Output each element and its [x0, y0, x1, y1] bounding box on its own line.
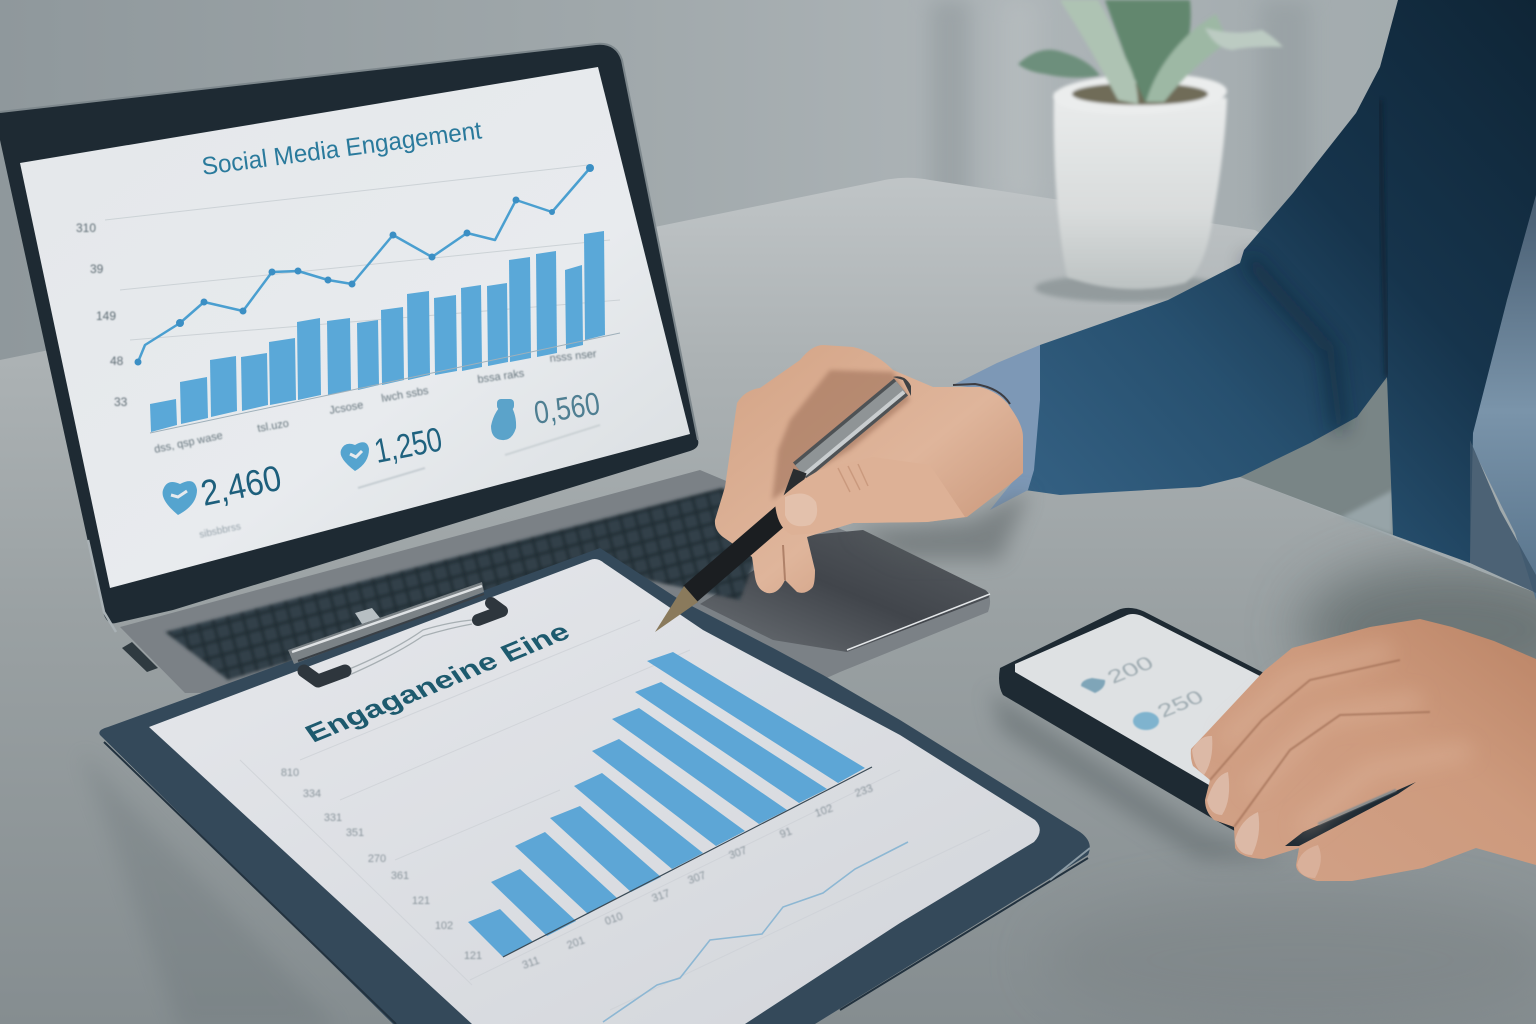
jacket sleeve and torso: [1025, 0, 1536, 563]
screen axis labels: 310: [76, 221, 96, 235]
clip caps: [304, 671, 345, 681]
clipboard axis labels: 91: [778, 825, 794, 841]
clipboard axis labels: 233: [853, 782, 875, 800]
clipboard axis labels: 270: [368, 853, 386, 865]
phone body: [999, 608, 1416, 845]
screen bar labels: dss, qsp wase: [153, 430, 224, 456]
clipboard axis labels: 307: [727, 844, 749, 862]
left hand with pen: [655, 345, 1030, 632]
background wall: [0, 0, 1536, 620]
finger creases: [1210, 660, 1430, 827]
clipboard axis labels: 331: [324, 812, 342, 824]
stat: 2,460: 2,460: [197, 457, 285, 514]
keyboard: [165, 488, 772, 680]
laptop screen: [20, 67, 690, 588]
fingernails: [1192, 736, 1212, 775]
right hand on phone: [1191, 619, 1536, 881]
stat: 2,460: [163, 457, 285, 541]
hand back: [715, 345, 1023, 593]
screen bar labels: [153, 348, 597, 456]
phone stat: 200: [1081, 652, 1158, 693]
stat: 0,560: [491, 385, 602, 455]
clip wires: [347, 620, 472, 676]
screen title: Social Media Engagement: [200, 116, 483, 181]
screen line chart: [134, 164, 594, 366]
thumb: [775, 457, 965, 535]
clipboard axis labels: 334: [303, 788, 321, 800]
clipboard axis labels: 121: [412, 895, 430, 907]
clipboard axis labels: 351: [346, 827, 364, 839]
clipboard axis labels: 102: [813, 802, 835, 820]
spacebar glint: [355, 608, 380, 624]
hand shadow: [850, 490, 1030, 560]
phone sliver between fingers: [1285, 782, 1416, 846]
stat: 0,560: 0,560: [531, 385, 602, 431]
clipboard axis labels: 361: [391, 870, 409, 882]
clipboard axis labels: 307: [686, 869, 708, 887]
clipboard axis labels: 311: [521, 955, 541, 972]
phone: [990, 608, 1416, 860]
clipboard paper: [149, 559, 1040, 1024]
clipboard grid lines: [240, 620, 990, 1010]
screen bar labels: lwch ssbs: [380, 385, 430, 405]
shirt cuff: [953, 345, 1040, 510]
screen axis labels: [76, 221, 128, 409]
screen bar labels: nsss nser: [549, 348, 597, 365]
floor gap between arm and torso: [1240, 370, 1393, 535]
laptop base: [120, 470, 990, 693]
clipboard metal clip: [288, 582, 502, 681]
screen bar chart: [150, 231, 605, 432]
clipboard line chart: [603, 842, 908, 1022]
pen: [655, 376, 911, 632]
clipboard board: [99, 548, 1090, 1024]
laptop foot: [122, 642, 158, 672]
shirt: [1465, 180, 1536, 600]
clipboard axis labels: 010: [603, 910, 625, 928]
phone stat: 200: 200: [1103, 652, 1158, 688]
screen bar labels: bssa raks: [477, 367, 526, 386]
phone stat: 250: [1133, 686, 1208, 730]
stat: 1,250: [341, 421, 445, 488]
clipboard axis labels: 810: [281, 767, 299, 779]
clipboard heading: Engaganeine Eine: [299, 617, 575, 748]
phone shadow: [990, 690, 1290, 860]
plant leaves: [1018, 0, 1283, 104]
phone stat: 250: 250: [1153, 686, 1208, 722]
clipboard bar chart: [468, 652, 865, 957]
stat: 1,250: 1,250: [371, 421, 445, 471]
screen bar labels: Jcsose: [328, 399, 364, 417]
clipboard axis labels: 201: [565, 934, 587, 952]
clipboard axis labels: [281, 767, 875, 972]
finger highlights: [1225, 650, 1470, 830]
pot body: [1054, 92, 1227, 289]
potted plant: [1018, 0, 1283, 289]
screen axis labels: 33: [114, 395, 128, 409]
screen axis labels: 39: [90, 262, 104, 276]
stat: 2,460: sibsbbrss: [198, 521, 242, 541]
clipboard axis labels: 317: [650, 887, 672, 905]
laptop: [0, 44, 990, 693]
phone screen: [1015, 614, 1260, 785]
person: jacket and shirt: [953, 0, 1536, 600]
clip bar: [288, 582, 484, 664]
laptop lid: [0, 44, 698, 623]
side tablet: [700, 530, 989, 652]
clipboard axis labels: 121: [464, 950, 482, 962]
screen axis labels: 48: [110, 354, 124, 368]
clipboard axis labels: 102: [435, 920, 453, 932]
screen axis labels: 149: [96, 309, 116, 323]
screen bar labels: tsl.uzo: [256, 418, 290, 435]
